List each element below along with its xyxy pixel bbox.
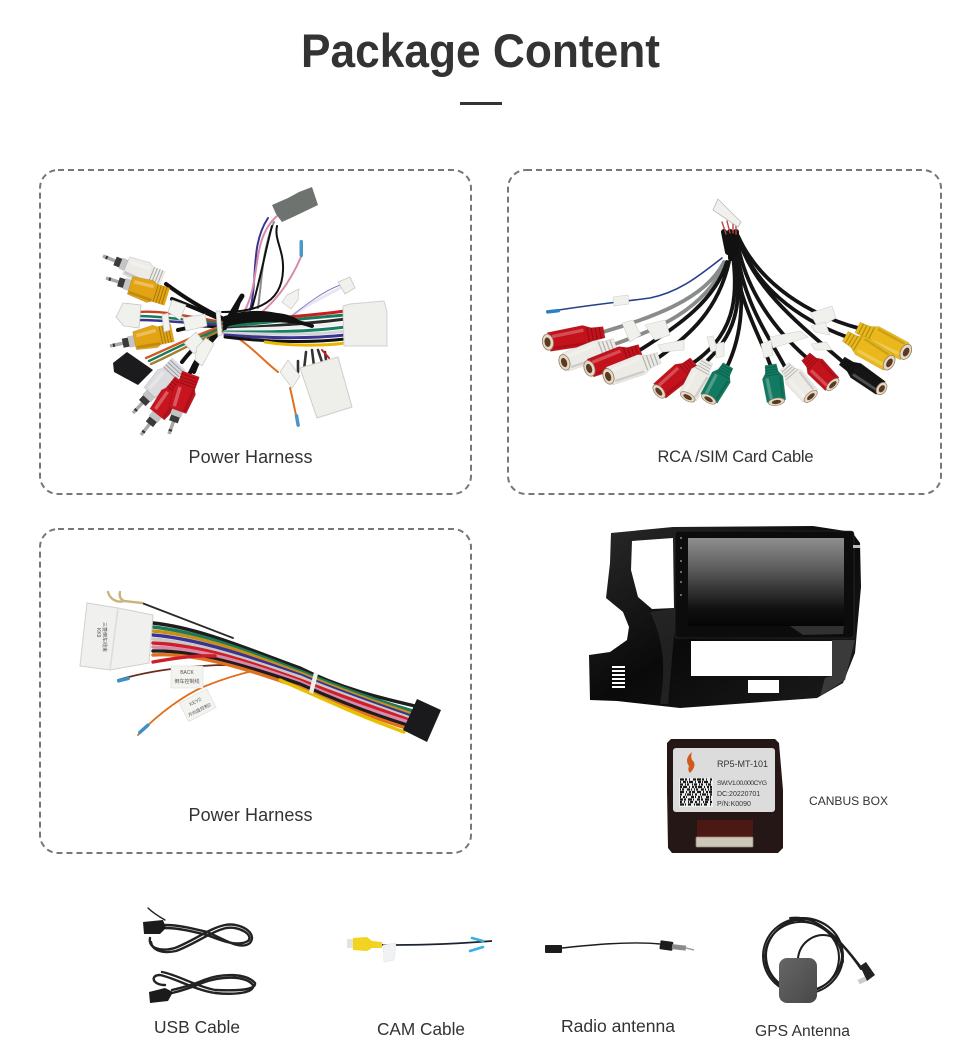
- wire label KEY2: KEY2: [189, 697, 203, 708]
- image: harness wires: [118, 603, 415, 735]
- panel: power harness 1: [40, 170, 471, 494]
- GPS puck: [779, 958, 817, 1003]
- title: Package Content: [301, 24, 660, 77]
- terminals: blue pins: [294, 240, 303, 427]
- box body: [667, 739, 783, 853]
- head unit with black fascia: [589, 526, 861, 708]
- wire label KEY2: 方向盘控制2: [187, 701, 213, 719]
- wire labels and cable tie: [162, 289, 300, 388]
- metal barrel: [672, 944, 686, 951]
- fascia frame: [589, 526, 861, 708]
- item: GPS antenna: [759, 912, 875, 1003]
- label: RCA / SIM card cable: RCA /SIM Card Cable: [658, 448, 814, 466]
- label text: DC:20220701: [717, 791, 760, 798]
- label: GPS antenna: GPS Antenna: [755, 1023, 850, 1040]
- USB plug top: [143, 920, 166, 934]
- title underline: [460, 102, 502, 105]
- screen: [675, 531, 854, 638]
- wire label BACK: [171, 666, 203, 688]
- fascia gloss sweep: [650, 608, 676, 704]
- item: USB cable: [143, 908, 255, 1003]
- connector: white SIM plug: [713, 199, 741, 227]
- label text: SW:V1.00.000CYG: [717, 780, 767, 787]
- label: USB cable: USB Cable: [154, 1017, 240, 1037]
- cable wire: [382, 941, 492, 945]
- right plug: [659, 940, 673, 951]
- yellow RCA plug: [347, 937, 382, 951]
- connector: white lower plug: [300, 357, 352, 418]
- wire label BACK: BACK: [180, 670, 194, 676]
- label: power harness 2: Power Harness: [188, 805, 312, 825]
- label text: [717, 759, 768, 808]
- logo: [687, 752, 694, 773]
- USB plug bottom: [149, 988, 173, 1003]
- connector: white main plug: [343, 301, 387, 346]
- female RCA sockets: [541, 318, 915, 408]
- label: radio antenna: Radio antenna: [561, 1016, 675, 1036]
- RCA plugs: [99, 245, 202, 442]
- wire label BACK: 倒车控制线: [174, 678, 200, 685]
- USB cable top coil: [148, 908, 252, 952]
- connector: black plug: [113, 352, 153, 385]
- terminal: blue pins: [117, 676, 150, 735]
- cable tie: [309, 672, 318, 694]
- label text: RP5-MT-101: [717, 759, 768, 769]
- vent stripes: [612, 666, 625, 688]
- label: CAM cable: CAM Cable: [377, 1019, 465, 1039]
- CANBUS box: [667, 739, 783, 853]
- connector: black ISO plug: [403, 699, 441, 742]
- USB cable bottom coil: [154, 972, 255, 994]
- blue terminals: [470, 938, 483, 951]
- panel: RCA and SIM card cable: [508, 170, 941, 494]
- label: power harness 1: Power Harness: [188, 447, 312, 467]
- connector port: [696, 837, 753, 847]
- left plug: [545, 945, 562, 953]
- item: radio antenna: [545, 940, 694, 953]
- screen side buttons: [680, 537, 682, 596]
- connector: white harness plug: [80, 603, 153, 670]
- metal pin: [686, 948, 694, 950]
- QR code: [679, 778, 713, 807]
- fascia right gloss: [820, 640, 855, 696]
- product label: [673, 748, 775, 812]
- image: power harness with RCA plugs: [138, 216, 345, 415]
- connector: grey top plug: [272, 187, 318, 222]
- GPS cable coils: [759, 912, 863, 998]
- small cutout: [748, 680, 779, 693]
- angled GPS connector: [860, 962, 875, 981]
- label text: P/N:K0090: [717, 801, 751, 808]
- wire label KEY2: [179, 689, 216, 722]
- terminal: blue pin: [546, 309, 560, 314]
- wire labels: [613, 295, 836, 358]
- image: RCA cable loom: [547, 221, 858, 367]
- connector tip: [858, 976, 867, 984]
- side clip: [853, 545, 860, 548]
- connector: small white plug: [338, 277, 355, 294]
- item: CAM cable: [347, 937, 492, 962]
- terminal: fork: [108, 592, 142, 603]
- connector: white harness plug: KK9: [95, 628, 101, 638]
- white tag: [383, 943, 396, 962]
- label: CANBUS box: CANBUS BOX: [809, 794, 888, 808]
- window cutout: [631, 538, 674, 609]
- connector: left white plug: [116, 303, 141, 328]
- connector: white harness plug: 三菱倒车线束: [101, 622, 108, 652]
- antenna wire: [562, 943, 660, 948]
- panel: power harness 2: [40, 529, 471, 853]
- box red tint: [697, 820, 753, 837]
- climate panel cutout: [691, 641, 832, 676]
